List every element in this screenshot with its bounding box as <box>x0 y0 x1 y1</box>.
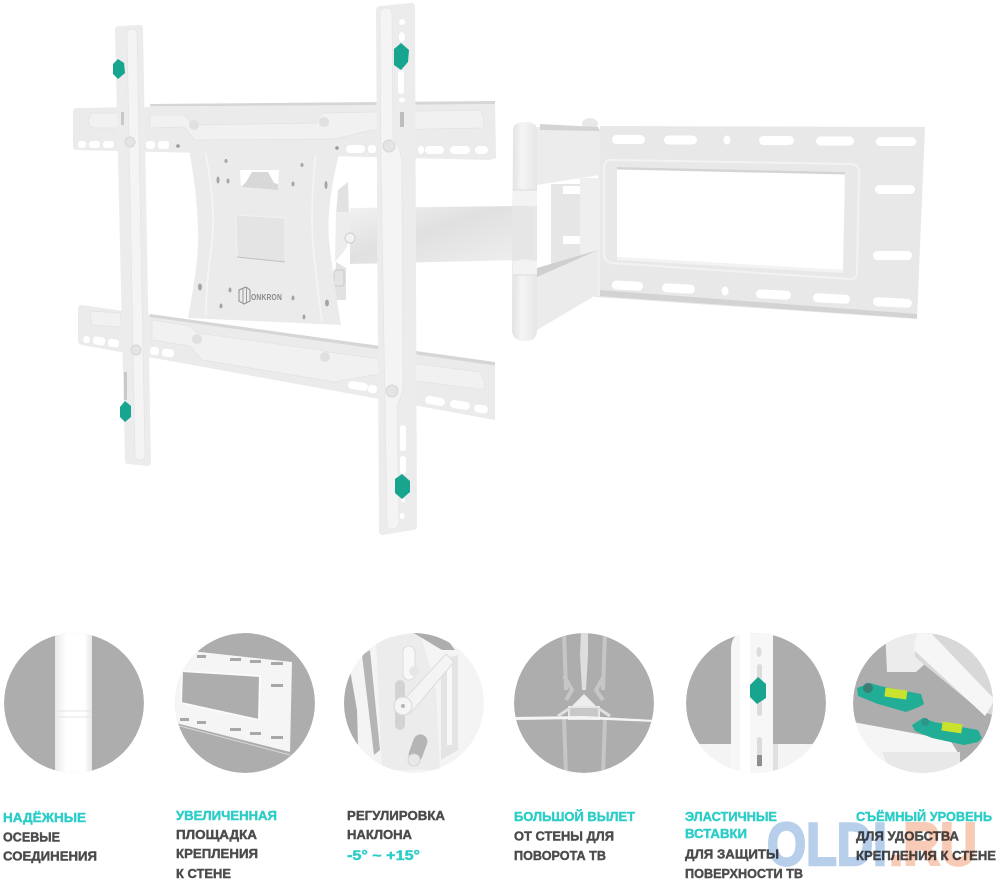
circle: axial joints <box>4 630 144 780</box>
teal elastic inserts <box>113 43 410 499</box>
circle: elastic inserts <box>686 633 826 775</box>
brand logo <box>239 287 282 304</box>
circle: removable level <box>853 630 995 775</box>
top horizontal rail <box>73 101 496 160</box>
caption 5: ВСТАВКИ <box>685 826 747 841</box>
caption 5: ПОВЕРХНОСТИ ТВ <box>685 866 803 881</box>
caption 4: БОЛЬШОЙ ВЫЛЕТ <box>514 809 635 824</box>
caption 5: ДЛЯ ЗАЩИТЫ <box>685 846 779 862</box>
watermark <box>767 811 977 878</box>
caption 3: НАКЛОНА <box>347 827 413 842</box>
wall plate <box>595 126 925 319</box>
caption 6 <box>856 809 996 863</box>
left vertical rail <box>115 25 151 466</box>
caption 6: ДЛЯ УДОБСТВА <box>856 828 960 844</box>
product: TV wall mount <box>73 3 925 535</box>
green level top <box>857 683 924 712</box>
caption 1: ОСЕВЫЕ <box>3 830 60 844</box>
green level bottom <box>912 718 982 745</box>
caption 1 <box>3 810 97 864</box>
watermark: .RU <box>889 811 977 878</box>
circle: tilt adjustment <box>344 630 484 773</box>
caption 4: ОТ СТЕНЫ ДЛЯ <box>514 828 614 844</box>
caption 3: РЕГУЛИРОВКА <box>347 808 446 823</box>
brand logo: ONKRON <box>251 293 282 302</box>
caption 6: КРЕПЛЕНИЯ К СТЕНЕ <box>856 848 996 863</box>
caption 2 <box>176 808 277 881</box>
caption 3: -5° ~ +15° <box>347 847 420 863</box>
hinge <box>512 122 537 341</box>
caption 4: ПОВОРОТА ТВ <box>514 848 606 863</box>
caption 6: СЪЁМНЫЙ УРОВЕНЬ <box>856 809 992 824</box>
caption 2: УВЕЛИЧЕННАЯ <box>176 808 277 823</box>
circle: enlarged wall plate <box>172 633 315 773</box>
bottom horizontal rail <box>78 305 495 420</box>
caption 4 <box>514 809 635 863</box>
tilt mechanism <box>334 182 355 300</box>
caption 2: КРЕПЛЕНИЯ <box>176 846 258 861</box>
caption 2: К СТЕНЕ <box>176 866 231 881</box>
watermark: OLDI <box>767 811 887 878</box>
caption 1: НАДЁЖНЫЕ <box>3 810 86 825</box>
articulated arms <box>350 118 600 330</box>
right vertical rail <box>376 3 417 535</box>
caption 3 <box>347 808 446 863</box>
caption 1: СОЕДИНЕНИЯ <box>3 848 97 864</box>
caption 5 <box>685 809 803 881</box>
VESA centre plate <box>188 145 341 325</box>
caption 2: ПЛОЩАДКА <box>176 827 258 842</box>
circle: wall extension top view <box>514 632 654 775</box>
caption 5: ЭЛАСТИЧНЫЕ <box>685 809 777 824</box>
